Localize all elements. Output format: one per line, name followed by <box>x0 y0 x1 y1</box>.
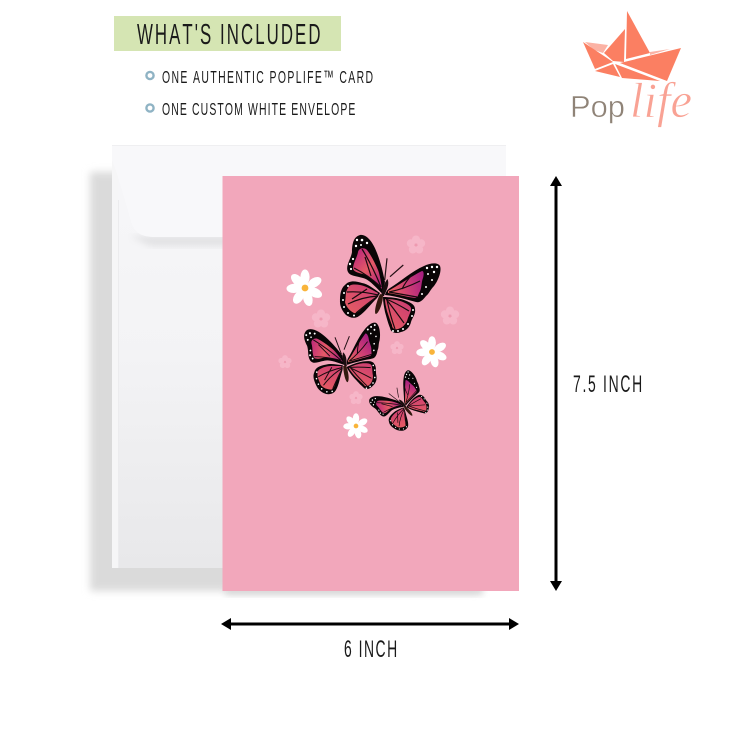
logo: poplife: Pop <box>570 89 625 124</box>
heading: what's included: WHAT'S INCLUDED <box>137 20 323 51</box>
list of included items: ONE CUSTOM WHITE ENVELOPE <box>162 100 356 120</box>
envelope flap <box>112 146 506 246</box>
envelope with shadow <box>90 145 506 591</box>
logo: poplife: life <box>630 72 692 128</box>
pink card <box>222 176 519 591</box>
list of included items <box>146 68 374 120</box>
width label: 6 INCH <box>344 636 399 663</box>
butterfly: middle <box>292 300 402 409</box>
list of included items: ONE AUTHENTIC POPLIFE™ CARD <box>162 68 374 88</box>
width arrow <box>221 618 519 630</box>
daisies <box>286 270 448 439</box>
blossoms <box>278 236 459 404</box>
height arrow <box>550 176 562 591</box>
butterfly: small <box>363 361 441 439</box>
butterfly: large <box>340 235 441 333</box>
card shadow <box>225 586 483 595</box>
height label: 7.5 INCH <box>573 371 644 398</box>
logo: poplife <box>570 11 692 128</box>
